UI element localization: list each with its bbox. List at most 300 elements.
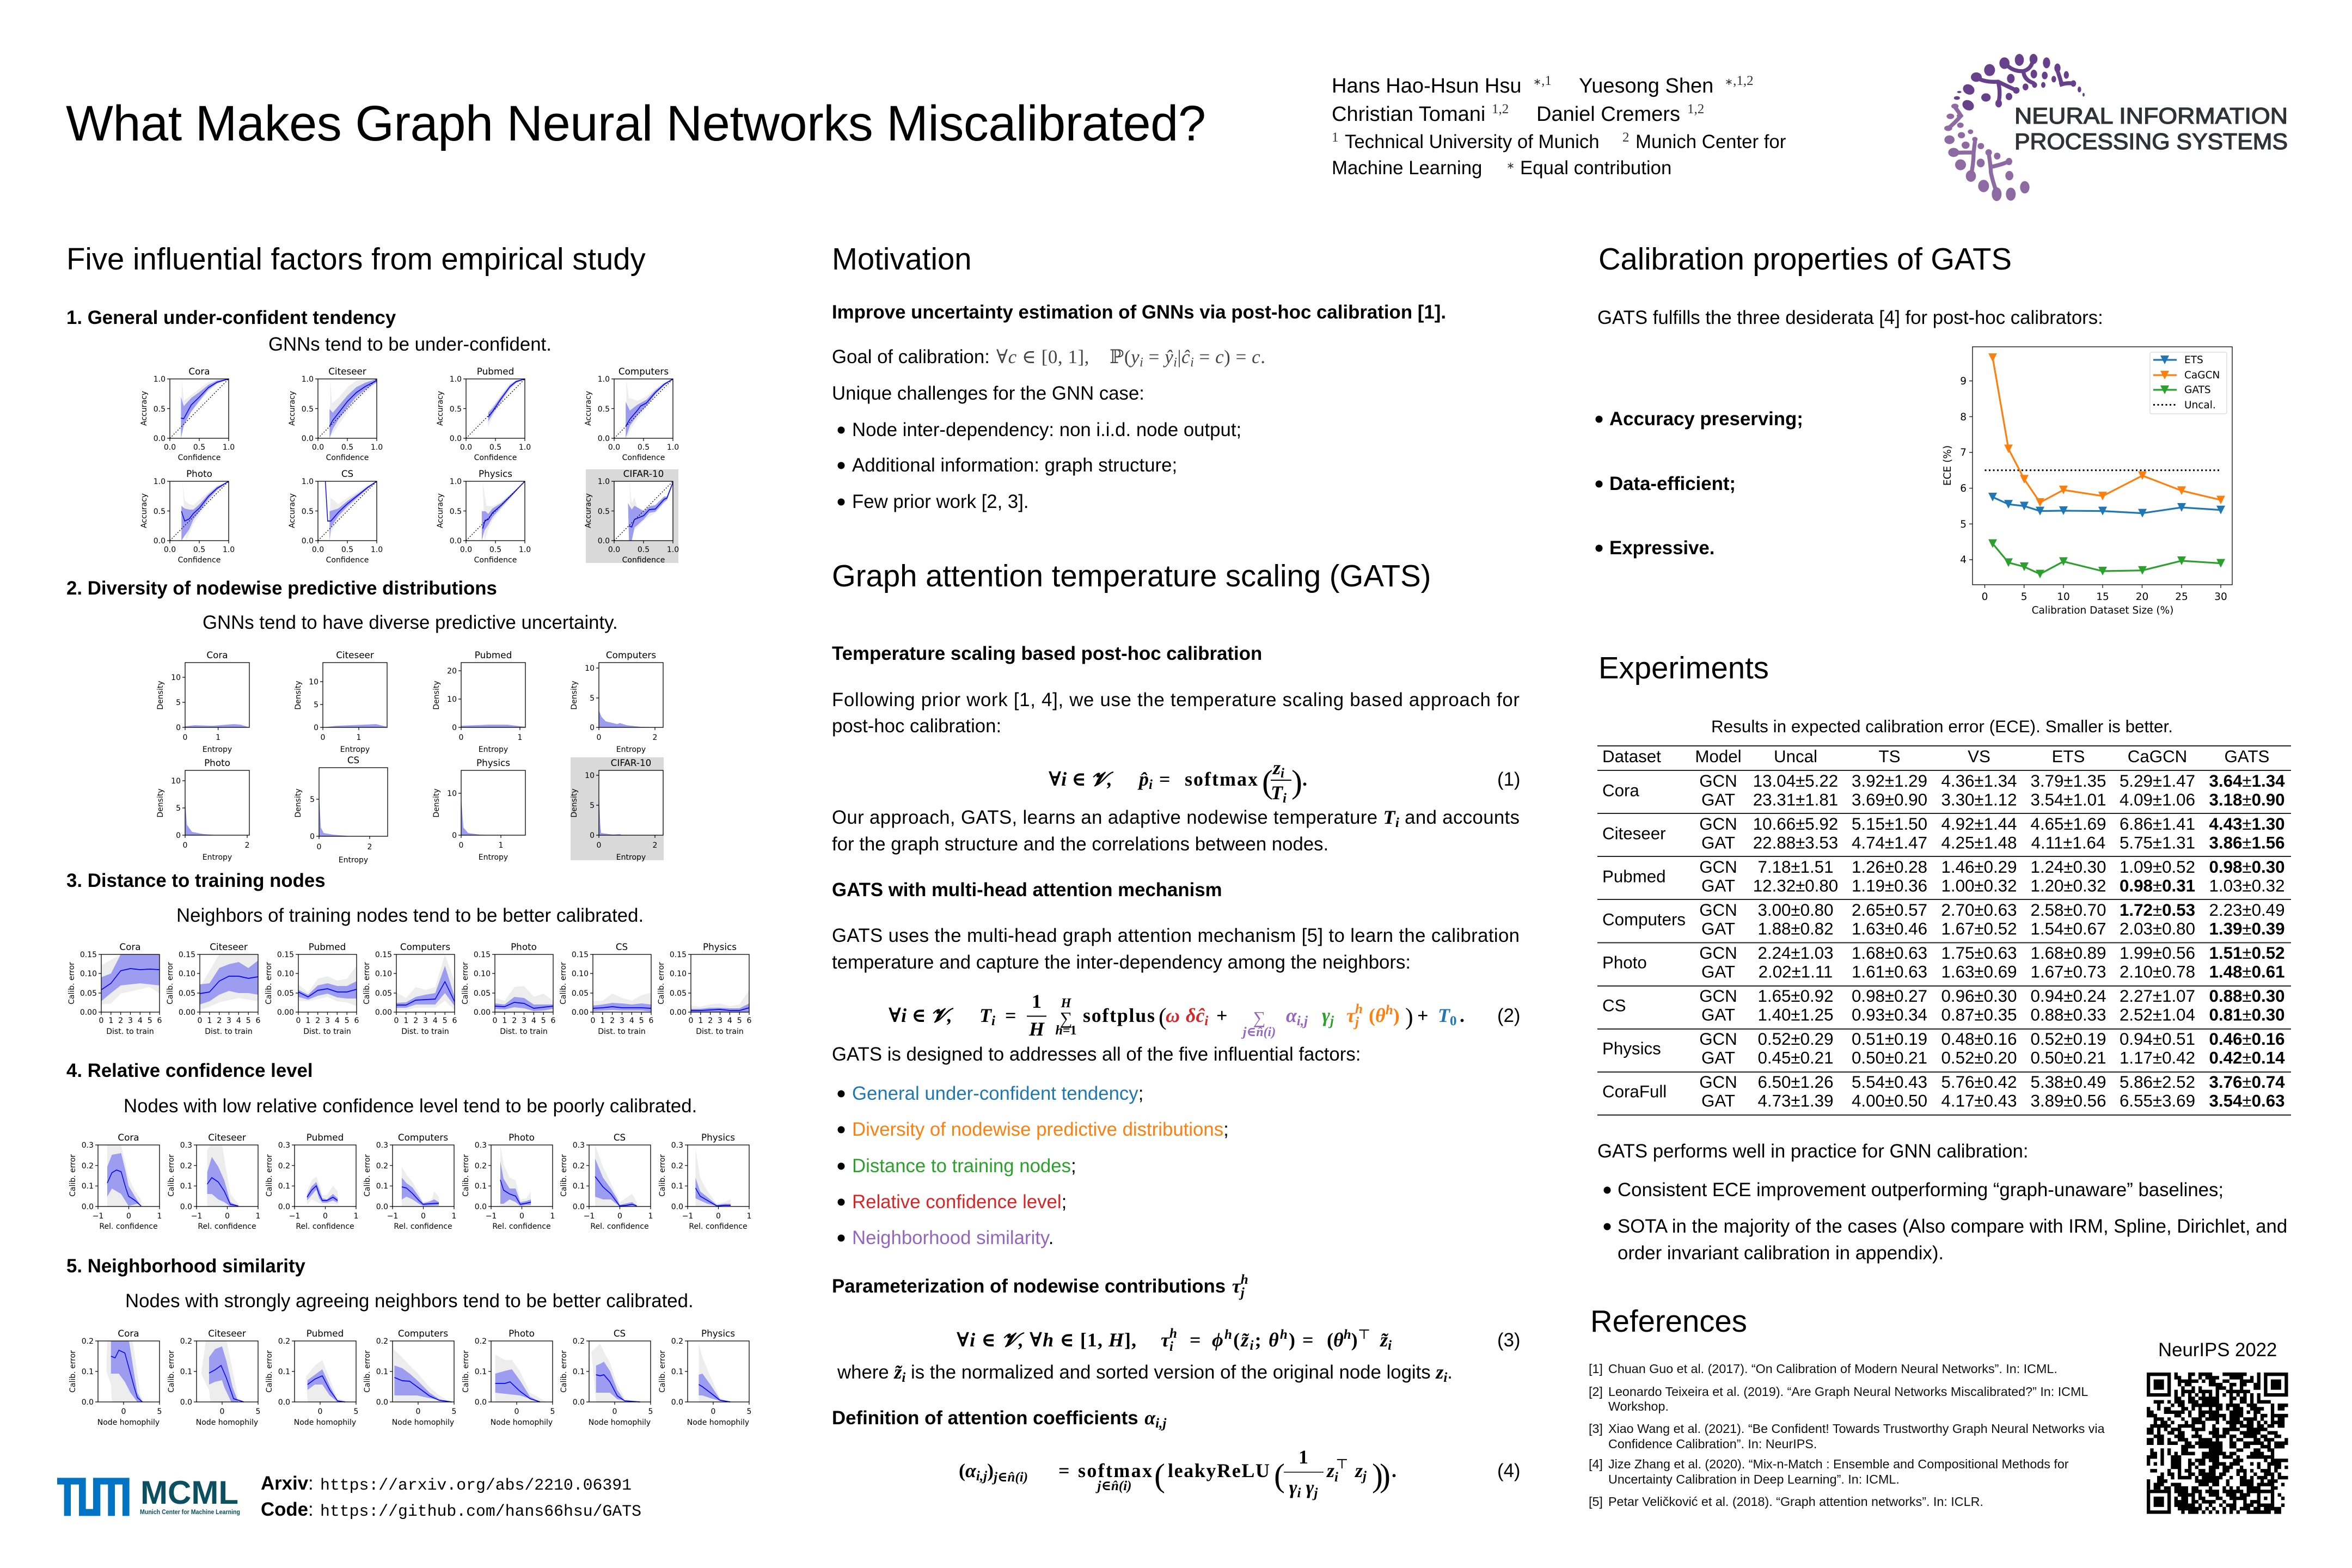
- chart: CS: Confidence: [326, 556, 369, 565]
- chart: Pubmed homophily: Calib. error: [265, 1350, 274, 1393]
- table: ECE results: GCN: [1699, 814, 1737, 834]
- equation 1: p̂: [1139, 768, 1149, 790]
- chart: Physics: 0.5: [489, 546, 501, 554]
- chart: Pubmed density: 0: [459, 733, 463, 742]
- chart: Pubmed homophily: 0.2: [278, 1337, 290, 1346]
- authors and affiliations: ∗,1: [1533, 74, 1552, 88]
- chart group: calibration error vs distance: [68, 941, 752, 1036]
- heading: GATS: Graph attention temperature scaling (GATS): [832, 559, 1431, 593]
- icon: MCML logo: MCML: [140, 1474, 238, 1511]
- table: ECE results: 4.00±0.50: [1852, 1091, 1927, 1111]
- chart: Physics distance: Physics: [703, 941, 737, 952]
- equation 4: ): [1380, 1457, 1391, 1493]
- chart: CS distance: [559, 941, 654, 1036]
- equation 3: (θ: [1327, 1329, 1344, 1351]
- chart: Computers distance: [363, 941, 457, 1036]
- chart: Cora relative confidence: 0.3: [82, 1141, 94, 1150]
- table: ECE results: 2.27±1.07: [2120, 987, 2195, 1006]
- chart: Computers: 0.5: [598, 405, 610, 414]
- table: ECE results: 0.93±0.34: [1852, 1005, 1927, 1025]
- chart: Physics density: Entropy: [479, 853, 508, 862]
- chart: CS homophily: Node homophily: [589, 1418, 651, 1427]
- chart: Computers relative confidence: 0.3: [376, 1141, 388, 1150]
- chart: Pubmed distance: Pubmed: [309, 941, 346, 952]
- chart: Computers density: [570, 650, 663, 754]
- text: factor 4 finding: Nodes with low relative confidence level tend to be poorly calibrated.: [124, 1096, 697, 1117]
- chart: Pubmed homophily: 0: [318, 1407, 322, 1416]
- equation 4: softmax: [1078, 1460, 1152, 1481]
- chart: Pubmed relative confidence: [265, 1132, 358, 1231]
- equation 3: i: [1388, 1338, 1392, 1353]
- panel: temperature scaling: Following prior work [1, 4], we use the temperature scaling based approach for: [832, 690, 1520, 710]
- chart: Computers density: 10: [585, 664, 595, 673]
- list: references: [1589, 1362, 2105, 1509]
- chart: Citeseer homophily: 5: [256, 1407, 260, 1416]
- chart: Photo: 0.0: [154, 537, 166, 546]
- equation 4: j: [1361, 1469, 1367, 1484]
- authors and affiliations: [1332, 74, 1786, 179]
- table: ECE results: 4.17±0.43: [1941, 1091, 2017, 1111]
- chart: Citeseer density: 0: [314, 724, 318, 732]
- chart: Cora homophily: Cora: [118, 1328, 139, 1339]
- table: ECE results: 0.51±0.19: [1852, 1030, 1927, 1049]
- panel: temperature scaling: for the graph structure and the correlations between nodes.: [832, 834, 1328, 855]
- equation 2: h: [1355, 1002, 1363, 1016]
- chart: Photo distance: 0.00: [474, 1008, 491, 1017]
- text: factor 1 finding: GNNs tend to be under-confident.: [268, 334, 552, 355]
- chart: CIFAR-10 density highlighted: [570, 757, 664, 862]
- panel: motivation text: Additional information: graph structure;: [852, 455, 1177, 476]
- legend: GATS: [2184, 384, 2211, 396]
- table: ECE results: 2.23±0.49: [2209, 901, 2285, 920]
- chart: Citeseer homophily: 0.0: [180, 1398, 192, 1407]
- text: practice summary: GATS performs well in practice for GNN calibration:: [1597, 1141, 2028, 1162]
- chart: Photo: Photo: [186, 468, 212, 479]
- chart: Cora relative confidence: 0.2: [82, 1162, 94, 1171]
- table: ECE results: 1.67±0.52: [1941, 919, 2017, 939]
- table: ECE results: 0.42±0.14: [2209, 1049, 2285, 1067]
- table: ECE results: Pubmed: [1602, 867, 1666, 886]
- equation 3: τ: [1161, 1329, 1169, 1351]
- chart: Cora density: 5: [176, 699, 181, 707]
- chart: Cora density: 0: [183, 733, 187, 742]
- chart: Citeseer: 1.0: [302, 375, 314, 384]
- table: ECE results: 2.03±0.80: [2120, 919, 2195, 939]
- chart: Photo relative confidence: Rel. confidence: [492, 1222, 551, 1231]
- chart: CIFAR-10 density highlighted: 0: [597, 841, 601, 850]
- table: ECE results: 13.04±5.22: [1753, 771, 1838, 791]
- table: ECE results: 6.50±1.26: [1757, 1073, 1834, 1092]
- table: ECE results: 3.69±0.90: [1852, 791, 1927, 809]
- chart: Computers relative confidence: Computers: [398, 1132, 448, 1143]
- chart: Physics density: 0: [452, 831, 457, 840]
- chart: Physics relative confidence: 0.3: [671, 1141, 683, 1150]
- chart: Pubmed: 0.0: [460, 443, 472, 452]
- heading: factor 5: 5. Neighborhood similarity: [66, 1255, 306, 1277]
- equation 2: ): [1405, 1003, 1413, 1030]
- chart: Photo homophily: 0.0: [475, 1398, 487, 1407]
- equation 4: j∈n̂(i): [1095, 1479, 1131, 1493]
- table: ECE results: 1.75±0.63: [1941, 944, 2017, 963]
- chart: Computers: 0.5: [638, 443, 650, 452]
- table: ECE results: CaGCN: [2128, 747, 2187, 766]
- chart: Citeseer density: [294, 650, 387, 754]
- chart: Cora distance: 0123456: [99, 1016, 162, 1025]
- chart: Pubmed density: [432, 650, 525, 754]
- panel: parameterization: .: [1447, 1362, 1453, 1383]
- chart: Pubmed density: 20: [447, 667, 457, 676]
- chart: CS: 0.5: [341, 546, 353, 554]
- chart: Citeseer relative confidence: 0.0: [180, 1203, 192, 1211]
- legend: ETS: [2184, 354, 2203, 366]
- chart: Cora: Cora: [188, 366, 210, 377]
- chart: Citeseer relative confidence: 0.3: [180, 1141, 192, 1150]
- list: references: Xiao Wang et al. (2021). “Be Confident! Towards Trustworthy Graph Neural Networks via: [1608, 1422, 2105, 1436]
- table: ECE results: 0.52±0.20: [1941, 1049, 2017, 1067]
- table: ECE results: 1.67±0.73: [2030, 963, 2106, 981]
- chart: Cora homophily: 0: [121, 1407, 126, 1416]
- table: ECE results: 0.96±0.30: [1941, 987, 2017, 1006]
- table: ECE results: 3.30±1.12: [1941, 791, 2017, 809]
- table: ECE results: 0.45±0.21: [1757, 1049, 1834, 1067]
- list: five factors in colour: General under-confident tendency;: [852, 1083, 1143, 1104]
- icon: NeurIPS logo: PROCESSING SYSTEMS: [2014, 128, 2288, 154]
- chart: CS relative confidence: CS: [614, 1132, 626, 1143]
- chart: Pubmed homophily: 0.1: [278, 1368, 290, 1376]
- chart: Physics density: 1: [499, 841, 503, 850]
- chart: Computers relative confidence: 0.0: [376, 1203, 388, 1211]
- chart: Physics relative confidence: Calib. error: [658, 1154, 667, 1197]
- chart: Physics relative confidence: Rel. confidence: [689, 1222, 748, 1231]
- equation 2: δĉ: [1186, 1004, 1204, 1026]
- list: references: Confidence Calibration”. In: NeurIPS.: [1608, 1437, 1817, 1451]
- equation 2: 0: [1450, 1014, 1457, 1028]
- chart: Citeseer distance: [166, 941, 261, 1036]
- table: ECE results: GAT: [1701, 1005, 1735, 1025]
- chart: Computers density: Computers: [606, 650, 656, 660]
- chart: Pubmed density: Pubmed: [475, 650, 512, 660]
- chart: Physics homophily: [658, 1328, 751, 1427]
- table: ECE results: 2.52±1.04: [2120, 1005, 2195, 1025]
- table: ECE results: 1.61±0.63: [1852, 963, 1927, 981]
- equation 4: i,j: [976, 1469, 988, 1484]
- equation 2: [889, 990, 1520, 1040]
- chart: Citeseer: Citeseer: [328, 366, 366, 377]
- chart: Photo relative confidence: −1: [486, 1212, 497, 1221]
- heading: experiments: Experiments: [1598, 651, 1769, 685]
- chart: CS homophily: 0: [612, 1407, 617, 1416]
- equation 2: =: [1005, 1004, 1016, 1026]
- panel: parameterization: i: [902, 1370, 905, 1385]
- chart: Cora relative confidence: 0.0: [82, 1203, 94, 1211]
- table: ECE results: 0.52±0.19: [2030, 1030, 2106, 1049]
- chart: CS distance: CS: [616, 941, 628, 952]
- chart: Cora relative confidence: Rel. confidence: [99, 1222, 158, 1231]
- table: ECE results: 0.81±0.30: [2209, 1005, 2285, 1025]
- chart: Cora homophily: Calib. error: [69, 1350, 77, 1393]
- equation 2: ∑: [1253, 1008, 1265, 1027]
- line: CaGCN: [1993, 358, 2221, 503]
- chart: Pubmed: 0.5: [489, 443, 501, 452]
- chart: Cora relative confidence: 0: [126, 1212, 131, 1221]
- panel: motivation text: Node inter-dependency: non i.i.d. node output;: [852, 420, 1241, 440]
- authors and affiliations: ∗,1,2: [1725, 74, 1754, 88]
- chart: CS homophily: [560, 1328, 653, 1427]
- chart: CS relative confidence: −1: [584, 1212, 595, 1221]
- chart: CS density: 2: [367, 843, 372, 852]
- chart: Photo density: 2: [245, 841, 249, 850]
- chart: Cora: Accuracy: [140, 391, 149, 426]
- chart: Pubmed relative confidence: Pubmed: [307, 1132, 344, 1143]
- chart: Physics distance: 0.05: [670, 989, 687, 998]
- authors and affiliations: Technical University of Munich: [1345, 132, 1600, 152]
- equation 1: ): [1291, 764, 1302, 800]
- table: ECE results: [1597, 746, 2291, 1115]
- chart: Photo distance: Dist. to train: [500, 1027, 548, 1036]
- chart: Cora relative confidence: [69, 1132, 162, 1231]
- chart: Pubmed homophily: [265, 1328, 358, 1427]
- equation 4: i: [1334, 1470, 1338, 1485]
- list: references: [5]: [1589, 1494, 1603, 1509]
- chart: ECE vs calibration dataset size: Calibration Dataset Size (%): [2032, 605, 2173, 616]
- equation 3: h: [1280, 1327, 1288, 1342]
- table: ECE results: 3.89±0.56: [2030, 1091, 2106, 1111]
- chart: Citeseer: 0.0: [302, 434, 314, 443]
- chart: CS: Accuracy: [288, 493, 297, 528]
- title: What Makes Graph Neural Networks Miscalibrated?: [66, 96, 1206, 151]
- list: references: Jize Zhang et al. (2020). “Mix-n-Match : Ensemble and Compositional Methods for: [1608, 1457, 2069, 1471]
- line: GATS: [1993, 543, 2221, 574]
- equation 2: (2): [1497, 1006, 1520, 1026]
- table: ECE results: 0.98±0.30: [2209, 857, 2285, 877]
- chart: Citeseer: 1.0: [371, 443, 383, 452]
- table: ECE results: 2.02±1.11: [1759, 963, 1833, 981]
- chart: CS distance: 0.00: [572, 1008, 589, 1017]
- equation 3: ;: [1255, 1329, 1267, 1351]
- table: ECE results: 2.70±0.63: [1941, 901, 2017, 920]
- equation 2: h: [1386, 1003, 1393, 1018]
- chart: CIFAR-10 highlighted: 1.0: [667, 546, 679, 554]
- chart: Pubmed relative confidence: −1: [289, 1212, 300, 1221]
- equation 4: z: [1355, 1460, 1363, 1481]
- chart: CS homophily: 0.2: [573, 1337, 585, 1346]
- chart: Photo: 1.0: [223, 546, 235, 554]
- equation 4: [959, 1446, 1520, 1500]
- list: five factors in colour: Distance to training nodes;: [852, 1156, 1076, 1177]
- chart: Physics: 1.0: [519, 546, 531, 554]
- chart: CS homophily: 0.1: [573, 1368, 585, 1376]
- chart: Citeseer homophily: [167, 1328, 260, 1427]
- authors and affiliations: 2: [1622, 130, 1629, 145]
- list: references: [2]: [1589, 1385, 1603, 1399]
- list: references: Petar Veličković et al. (2018). “Graph attention networks”. In: ICLR.: [1608, 1494, 1983, 1509]
- chart: Cora: 1.0: [223, 443, 235, 452]
- equation 4: =: [1058, 1460, 1070, 1481]
- equation 2: H: [1061, 996, 1072, 1010]
- table: ECE results: 1.09±0.52: [2120, 857, 2195, 877]
- chart: CIFAR-10 highlighted: 0.5: [598, 507, 610, 516]
- chart: Cora density: Density: [156, 681, 165, 710]
- chart: Citeseer density: Density: [294, 681, 303, 710]
- chart: Physics: Physics: [479, 468, 512, 479]
- chart: Cora relative confidence: 0.1: [82, 1182, 94, 1191]
- table: ECE results: 23.31±1.81: [1753, 791, 1838, 809]
- chart: Citeseer density: 5: [314, 701, 318, 709]
- chart: Photo: 0.5: [193, 546, 205, 554]
- chart: Cora homophily: 0.1: [82, 1368, 94, 1376]
- panel: parameterization: i: [1443, 1370, 1447, 1385]
- chart: CIFAR-10 density highlighted: 5: [590, 801, 595, 810]
- chart: CS density: 0: [310, 832, 315, 841]
- table: ECE results: 3.79±1.35: [2030, 771, 2106, 791]
- table: ECE results: 0.52±0.29: [1757, 1030, 1834, 1049]
- list: desiderata: [1595, 408, 1803, 559]
- chart: Citeseer relative confidence: Citeseer: [208, 1132, 246, 1143]
- panel: attention coefficients: [832, 1407, 1520, 1500]
- chart: Physics distance: 0.10: [670, 970, 687, 978]
- chart: Pubmed: 1.0: [519, 443, 531, 452]
- table: ECE results: VS: [1968, 747, 1990, 766]
- text: practice summary: [1597, 1141, 2287, 1264]
- chart: Pubmed relative confidence: 0.2: [278, 1162, 290, 1171]
- chart: Physics relative confidence: [658, 1132, 751, 1231]
- text: factor 5 finding: Nodes with strongly agreeing neighbors tend to be better calibrated.: [125, 1291, 694, 1312]
- table: ECE results: 4.43±1.30: [2209, 814, 2285, 834]
- panel: motivation text: Goal of calibration:: [832, 347, 990, 367]
- table: ECE results: Computers: [1602, 910, 1686, 929]
- chart: CS distance: Calib. error: [559, 962, 568, 1004]
- chart: Computers relative confidence: 1: [452, 1212, 456, 1221]
- table: ECE results: 5.75±1.31: [2120, 833, 2195, 853]
- chart: Computers distance: Dist. to train: [401, 1027, 449, 1036]
- chart: Pubmed distance: 0.00: [277, 1008, 294, 1017]
- table: ECE results: Uncal: [1774, 747, 1817, 766]
- chart: CS density: 0: [317, 843, 321, 852]
- equation 1: z: [1273, 757, 1281, 779]
- table: ECE results: ETS: [2052, 747, 2085, 766]
- chart: Computers density: 0: [590, 724, 595, 732]
- table: ECE results: GAT: [1701, 963, 1735, 981]
- heading: calibration properties: Calibration properties of GATS: [1598, 242, 2012, 276]
- chart: CS: [288, 468, 383, 565]
- chart: Pubmed distance: 0.15: [277, 951, 294, 959]
- table: ECE results: 3.76±0.74: [2209, 1073, 2285, 1092]
- chart: Citeseer: [288, 366, 383, 462]
- list: references: Uncertainty Calibration in Deep Learning”. In: ICML.: [1608, 1472, 1900, 1486]
- chart: Computers relative confidence: Rel. confidence: [394, 1222, 452, 1231]
- chart: Pubmed distance: 0123456: [296, 1016, 359, 1025]
- chart: CS distance: 0.10: [572, 970, 589, 978]
- table: ECE results: Physics: [1602, 1039, 1661, 1058]
- chart: Physics density: Physics: [476, 757, 510, 768]
- chart: Physics relative confidence: 0.0: [671, 1203, 683, 1211]
- chart: Cora: Confidence: [178, 454, 220, 462]
- authors and affiliations: Yuesong Shen: [1579, 75, 1713, 97]
- chart: Citeseer relative confidence: [167, 1132, 260, 1231]
- chart: Photo relative confidence: 0.3: [475, 1141, 487, 1150]
- chart: Computers relative confidence: −1: [387, 1212, 398, 1221]
- table: ECE results: 22.88±3.53: [1753, 833, 1838, 853]
- chart: ECE vs calibration dataset size: 15: [2096, 591, 2109, 603]
- chart group: calibration error vs node homophily: [69, 1328, 751, 1427]
- table: ECE results: 1.54±0.67: [2030, 919, 2106, 939]
- equation 1: i: [1149, 777, 1153, 792]
- authors and affiliations: 1,2: [1492, 102, 1509, 117]
- table: ECE results: 1.39±0.39: [2209, 919, 2285, 939]
- chart: CIFAR-10 highlighted: [584, 468, 679, 565]
- chart: CS homophily: 0.0: [573, 1398, 585, 1407]
- equation 2: j: [1353, 1015, 1359, 1030]
- panel: motivation text: i: [1140, 356, 1143, 370]
- equation 2: H: [1028, 1018, 1045, 1040]
- chart: Computers: [584, 366, 679, 462]
- text: practice summary: order invariant calibration in appendix).: [1618, 1243, 1944, 1264]
- chart: Cora relative confidence: −1: [93, 1212, 103, 1221]
- authors and affiliations: ∗: [1506, 160, 1515, 171]
- table: ECE results: 10.66±5.92: [1753, 814, 1838, 834]
- equation 2: γ: [1322, 1004, 1330, 1026]
- table: ECE results: 1.19±0.36: [1852, 877, 1927, 895]
- table: ECE results: 4.65±1.69: [2030, 814, 2106, 834]
- chart: Computers: 1.0: [598, 375, 610, 384]
- authors and affiliations: 1,2: [1687, 102, 1704, 117]
- links: arxiv and code: https://github.com/hans66hsu/GATS: [320, 1502, 641, 1521]
- chart: Cora density: 0: [176, 724, 181, 732]
- chart: Pubmed homophily: Pubmed: [307, 1328, 344, 1339]
- chart: CIFAR-10 highlighted: 0.5: [638, 546, 650, 554]
- list: five factors in colour: Diversity of nodewise predictive distributions;: [852, 1119, 1229, 1140]
- heading: factor 2: 2. Diversity of nodewise predictive distributions: [66, 578, 497, 599]
- table: ECE results: 0.94±0.51: [2120, 1030, 2195, 1049]
- table: ECE results: 0.46±0.16: [2209, 1030, 2285, 1049]
- equation 2: α: [1286, 1004, 1297, 1026]
- equation 3: i: [1169, 1339, 1173, 1354]
- table: ECE results: 3.18±0.90: [2209, 791, 2285, 809]
- chart: CIFAR-10 highlighted: 0.0: [598, 537, 610, 546]
- legend: [2150, 352, 2227, 414]
- chart: Pubmed density: Density: [432, 681, 441, 710]
- chart: Computers relative confidence: [363, 1132, 456, 1231]
- equation 1: T: [1271, 782, 1283, 804]
- panel: motivation text: ĉ: [1181, 346, 1194, 370]
- equation 2: .: [1460, 1004, 1465, 1026]
- panel: temperature scaling: post-hoc calibration:: [832, 716, 1001, 737]
- list: five factors in colour: Neighborhood similarity.: [852, 1228, 1054, 1248]
- chart: Citeseer homophily: Calib. error: [167, 1350, 176, 1393]
- chart: Photo density: Density: [156, 788, 165, 818]
- chart: Cora distance: Cora: [119, 941, 141, 952]
- panel: temperature scaling: Temperature scaling based post-hoc calibration: [832, 643, 1262, 664]
- chart: Cora density: [156, 650, 249, 754]
- chart: Citeseer distance: Calib. error: [166, 962, 175, 1004]
- panel: motivation text: Few prior work [2, 3].: [852, 492, 1029, 512]
- chart: Physics homophily: Calib. error: [658, 1350, 667, 1393]
- chart: CS density: [294, 755, 388, 865]
- chart: Physics density: 10: [447, 789, 457, 798]
- equation 2: i: [991, 1014, 995, 1028]
- chart: Computers density: Density: [570, 681, 579, 710]
- chart: Computers relative confidence: 0.2: [376, 1162, 388, 1171]
- equation 3: ): [1351, 1329, 1358, 1351]
- table: ECE results: Dataset: [1602, 747, 1661, 766]
- equation 1: i: [1283, 791, 1287, 806]
- table: ECE results: 0.98±0.31: [2120, 877, 2195, 895]
- equation 4: leakyReLU: [1168, 1460, 1270, 1481]
- chart: Pubmed relative confidence: 0: [323, 1212, 328, 1221]
- chart: Pubmed density: 0: [452, 724, 457, 732]
- chart: Physics relative confidence: 0: [716, 1212, 721, 1221]
- chart: CIFAR-10 highlighted: CIFAR-10: [623, 468, 664, 479]
